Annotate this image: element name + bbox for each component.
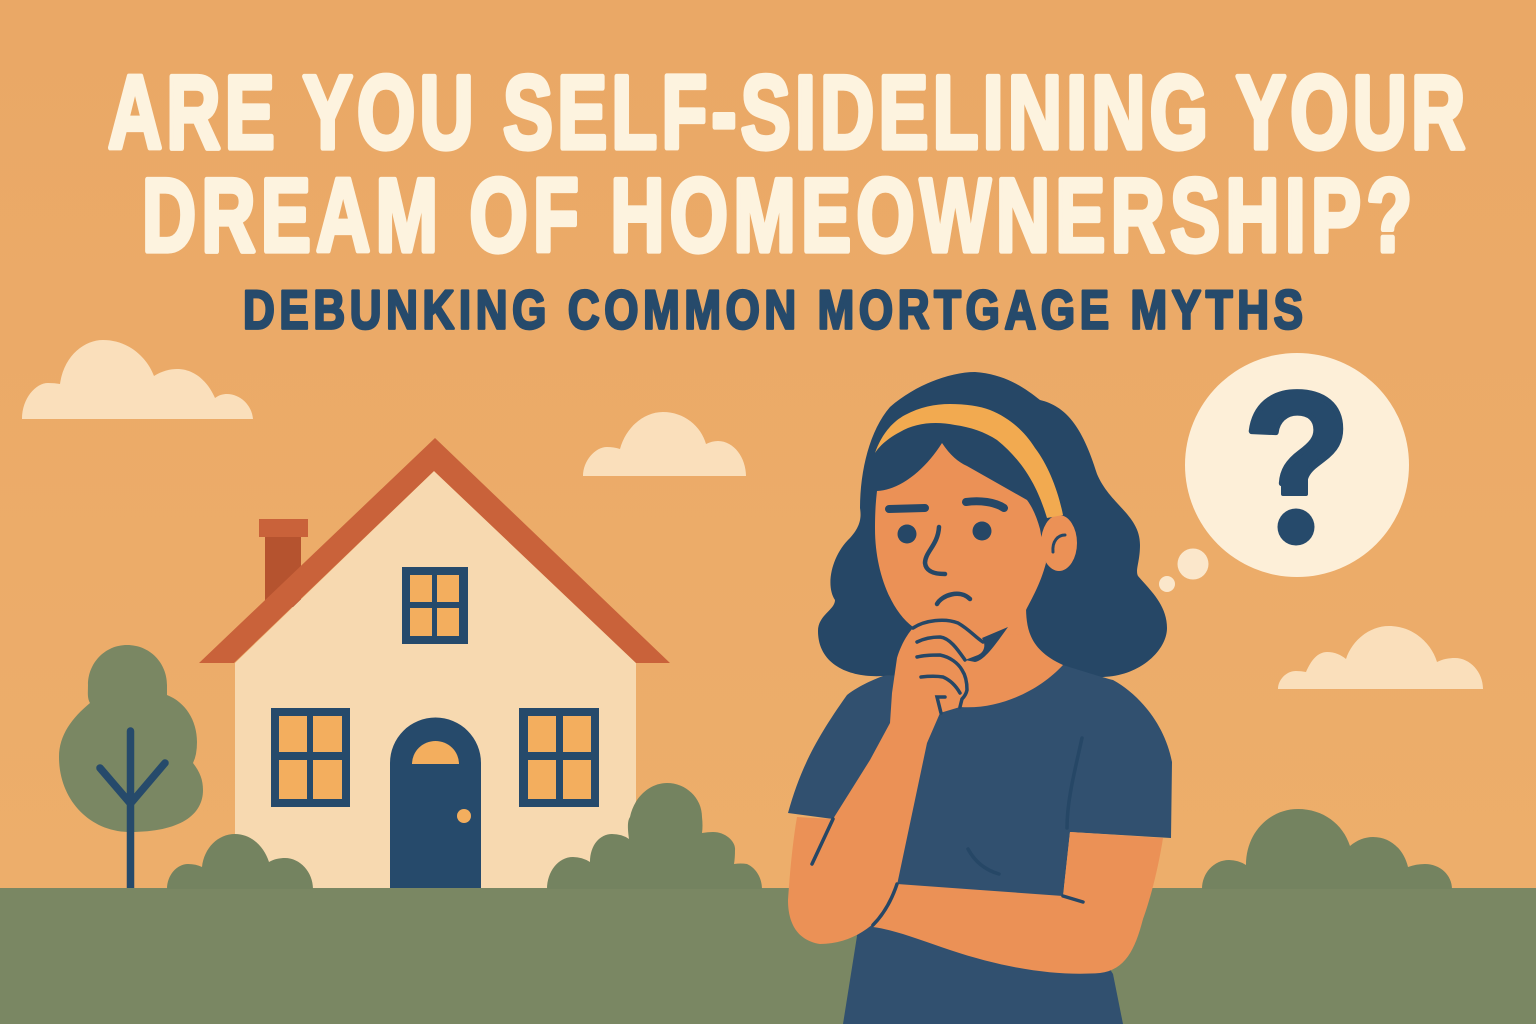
lower left window [271, 708, 350, 807]
bush middle [547, 783, 762, 889]
nose [925, 527, 945, 574]
tree [59, 645, 203, 888]
bush right [1202, 809, 1452, 889]
title [108, 55, 1465, 274]
house walls [235, 471, 636, 888]
ear [1041, 515, 1077, 571]
hand and arm lines [812, 620, 1083, 925]
bubble dot large [1178, 548, 1208, 580]
chimney cap [259, 519, 308, 537]
face [875, 443, 1046, 635]
thought bubble [1159, 353, 1409, 592]
eyes [898, 522, 992, 544]
headband [875, 404, 1063, 518]
bubble [1185, 353, 1409, 577]
door [390, 718, 481, 888]
lower right window [519, 708, 599, 807]
thumb shadow [965, 627, 1008, 662]
chimney stack [265, 537, 301, 607]
bubble dot small [1159, 576, 1175, 592]
ground [0, 888, 1536, 1024]
title line 1: ARE YOU SELF-SIDELINING YOUR [108, 55, 1465, 171]
neck [947, 605, 1063, 707]
bush left [167, 834, 313, 889]
folded forearm [873, 832, 1163, 974]
cloud right [1278, 626, 1483, 689]
question mark: ? [1244, 355, 1350, 562]
roof [199, 438, 670, 663]
title line 2: DREAM OF HOMEOWNERSHIP? [142, 158, 1412, 274]
subtitle: DEBUNKING COMMON MORTGAGE MYTHS [243, 279, 1303, 341]
hair [818, 372, 1167, 677]
trunk and branches [100, 731, 165, 888]
left arm raised to chin [788, 620, 985, 944]
mouth [937, 594, 970, 604]
foliage [59, 645, 203, 832]
eyebrows [889, 501, 1004, 509]
chimney [259, 519, 308, 607]
upper window [402, 567, 468, 644]
shirt [788, 665, 1172, 1024]
cloud top left [22, 340, 253, 419]
cloud middle [583, 412, 746, 476]
woman thinking [788, 372, 1172, 1024]
house [199, 438, 670, 888]
